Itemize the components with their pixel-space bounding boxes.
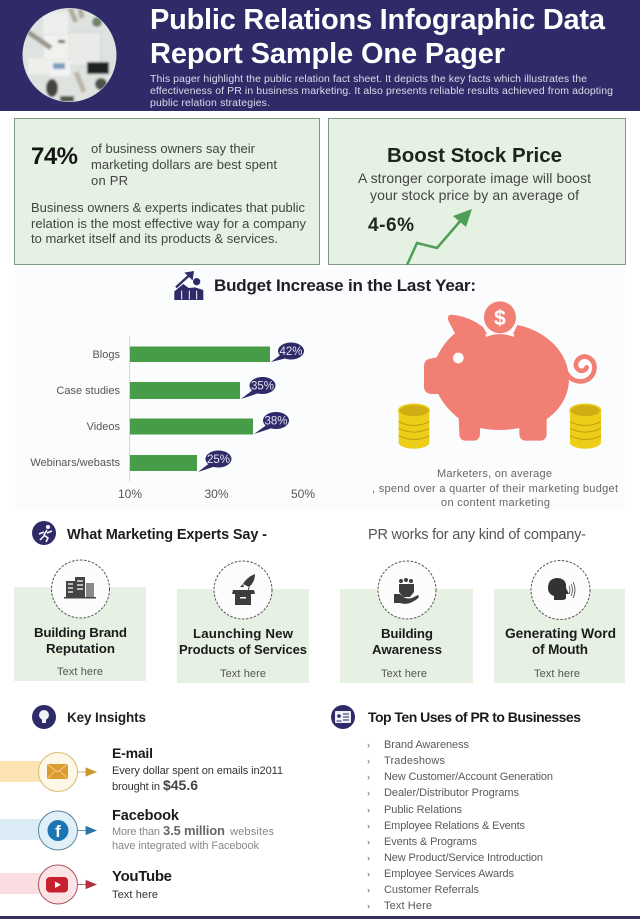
card: launching new products — [177, 561, 309, 683]
stat description: of business owners say their — [91, 141, 256, 156]
section heading: PR works for any company: PR works for any kind of company- — [368, 527, 586, 543]
header description: public relation strategies. — [150, 97, 270, 109]
supporting paragraph — [31, 200, 306, 246]
list of uses — [384, 739, 553, 912]
bar: Blogs 42% — [92, 342, 304, 362]
list chevrons — [367, 740, 370, 911]
list of uses: Public Relations — [384, 804, 462, 816]
stat: 4-6%: 4-6% — [368, 215, 414, 236]
list of uses: Tradeshows — [384, 755, 446, 767]
insight: facebook — [0, 808, 274, 852]
panel: budget increase — [15, 270, 625, 510]
list chevrons: › — [367, 740, 370, 750]
card text — [372, 626, 442, 680]
list of uses: Brand Awareness — [384, 739, 470, 751]
list of uses: Customer Referrals — [384, 884, 480, 896]
card text: Text here — [381, 668, 427, 680]
bar: Case studies 35%: Case studies — [56, 385, 120, 397]
section heading: what marketing experts say: What Marketing Experts Say - — [67, 527, 267, 543]
card text: Building Brand — [34, 625, 127, 640]
card text: Products of Services — [179, 642, 307, 657]
arrow — [78, 880, 96, 888]
card text — [505, 626, 616, 680]
bar: Case studies 35%: 35% — [251, 380, 274, 392]
bar chart — [30, 336, 315, 501]
insight text: YouTube — [112, 868, 172, 885]
list chevrons: › — [367, 772, 370, 782]
panel: 74% statistic — [14, 118, 320, 264]
card text: Reputation — [46, 641, 115, 656]
insight text: E-mail — [112, 745, 153, 761]
bar: Blogs 42%: 42% — [279, 346, 303, 358]
icon: light bulb — [32, 705, 56, 729]
bar: Webinars/webasts 25%: Webinars/webasts — [30, 457, 120, 469]
supporting paragraph: to market itself and its products & services. — [31, 231, 278, 246]
list chevrons: › — [367, 821, 370, 831]
insight text: Facebook — [112, 808, 180, 824]
list of uses: Text Here — [384, 900, 432, 912]
bar: Blogs 42%: Blogs — [92, 349, 120, 361]
list of uses: Employee Services Awards — [384, 868, 514, 880]
stat description: marketing dollars are best spent — [91, 157, 277, 172]
insight text: have integrated with Facebook — [112, 840, 260, 852]
bar: Videos 38%: 38% — [264, 416, 288, 428]
icon: piggy bank with coins — [399, 301, 601, 449]
chart x axis labels — [118, 487, 315, 501]
card text: Building — [381, 626, 433, 641]
piggy bank caption: , spend over a quarter of their marketing budget — [372, 483, 618, 495]
card text — [179, 626, 307, 680]
icon: id card — [331, 705, 355, 729]
section: top ten uses of PR — [331, 705, 581, 912]
list chevrons: › — [367, 756, 370, 766]
icon: piggy bank with coins: $ — [494, 306, 506, 330]
insight text: brought in — [112, 781, 160, 793]
list chevrons: › — [367, 869, 370, 879]
list chevrons: › — [367, 885, 370, 895]
bar: Videos 38% — [87, 412, 289, 434]
stat: 74%: 74% — [31, 143, 78, 170]
list chevrons: › — [367, 837, 370, 847]
supporting paragraph: Business owners & experts indicates that public — [31, 200, 306, 215]
coin stack left — [399, 404, 429, 449]
card: building awareness — [340, 561, 473, 683]
list of uses: Events & Programs — [384, 836, 478, 848]
header banner — [0, 0, 640, 111]
panel text: A stronger corporate image will boost — [358, 170, 591, 186]
heading: Budget Increase in the Last Year: — [214, 276, 476, 295]
icon: envelope — [47, 764, 68, 779]
piggy bank caption: Marketers, on average — [437, 468, 552, 480]
footer bar — [0, 916, 640, 919]
heading: Top Ten Uses of PR to Businesses — [368, 709, 581, 725]
card text: of Mouth — [532, 642, 588, 657]
arrow — [78, 768, 96, 776]
card text: Awareness — [372, 642, 442, 657]
stat description: on PR — [91, 173, 128, 188]
piggy bank caption: on content marketing — [441, 497, 550, 509]
list chevrons: › — [367, 788, 370, 798]
piggy bank caption — [372, 468, 618, 509]
card text: Text here — [220, 668, 266, 680]
arrow — [78, 826, 96, 834]
insight: e-mail — [0, 745, 283, 793]
insight text — [112, 808, 274, 852]
bar: Videos 38%: Videos — [87, 421, 120, 433]
insight text: Text here — [112, 889, 158, 901]
icon: office buildings — [64, 577, 96, 598]
bar: Case studies 35% — [56, 377, 276, 399]
icon: facebook: f — [55, 822, 61, 841]
list of uses: Employee Relations & Events — [384, 820, 526, 832]
insight text: Every dollar spent on emails in2011 — [112, 765, 283, 777]
icon: running person — [32, 521, 56, 545]
card: building brand reputation — [14, 560, 146, 681]
title: Public Relations Infographic Data — [150, 4, 606, 36]
header description — [150, 73, 613, 109]
card text: Generating Word — [505, 626, 616, 641]
title: Report Sample One Pager — [150, 38, 505, 70]
stat description — [91, 141, 277, 188]
insight text — [112, 868, 172, 901]
card text — [34, 625, 127, 678]
list of uses: New Product/Service Introduction — [384, 852, 543, 864]
supporting paragraph: relation is the most effective way for a company — [31, 216, 306, 231]
insight text: More than — [112, 826, 160, 838]
title — [150, 4, 606, 70]
insight text: websites — [229, 826, 274, 838]
coin stack right — [570, 404, 601, 449]
chart x axis labels: 10% — [118, 487, 142, 501]
icon: hand holding people — [394, 578, 419, 604]
list chevrons: › — [367, 853, 370, 863]
insight: youtube — [0, 865, 172, 904]
insight text — [112, 745, 283, 793]
icon: speaking head — [548, 578, 575, 600]
icon: youtube — [46, 877, 68, 892]
card: generating word of mouth — [494, 560, 625, 683]
icon: budget growth — [174, 271, 203, 300]
panel text: your stock price by an average of — [370, 187, 579, 203]
icon: rising green arrow — [407, 209, 472, 265]
chart x axis labels: 50% — [291, 487, 315, 501]
panel: boost stock price — [328, 118, 626, 265]
insight text: $45.6 — [163, 777, 198, 793]
chart x axis labels: 30% — [204, 487, 229, 501]
header description: effectiveness of PR in business marketing. It also presents reliable results achieved from adopting — [150, 85, 613, 97]
heading: Key Insights — [67, 710, 146, 725]
section: key insights — [0, 705, 283, 904]
section heading: what marketing experts say — [32, 521, 267, 545]
list of uses: New Customer/Account Generation — [384, 771, 553, 783]
card text: Launching New — [193, 626, 294, 641]
icon: rocket from box — [232, 574, 255, 605]
list chevrons: › — [367, 805, 370, 815]
card text: Text here — [57, 666, 103, 678]
panel text — [358, 170, 591, 203]
panel heading: Boost Stock Price — [387, 144, 562, 167]
icon: facebook — [48, 820, 68, 841]
bar: Webinars/webasts 25% — [30, 450, 232, 472]
card text: Text here — [534, 668, 580, 680]
list of uses: Dealer/Distributor Programs — [384, 787, 520, 799]
list chevrons: › — [367, 901, 370, 911]
insight text: 3.5 million — [163, 823, 225, 838]
bar: Webinars/webasts 25%: 25% — [207, 454, 230, 466]
header description: This pager highlight the public relation fact sheet. It depicts the key facts which illustrates the — [150, 73, 587, 85]
header photo: team at a desk — [22, 8, 116, 102]
